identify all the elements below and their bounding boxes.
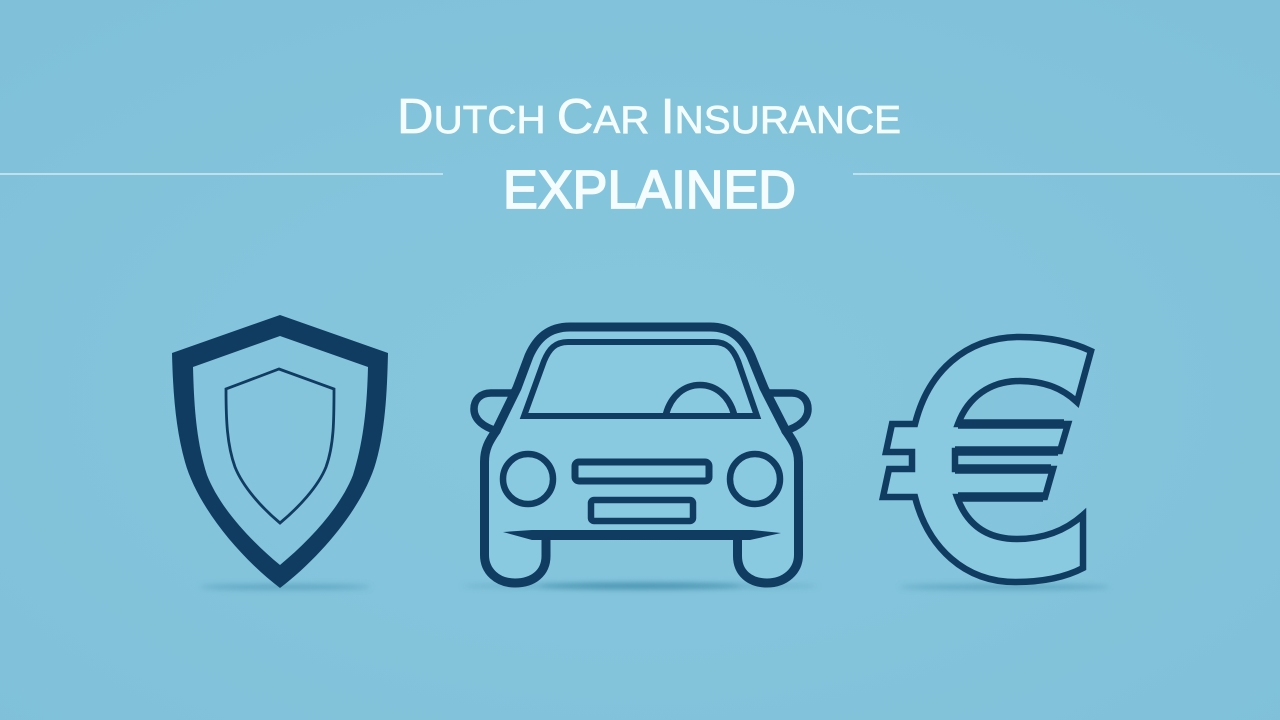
icon: car xyxy=(474,327,808,583)
number plate xyxy=(591,500,693,521)
heading: Explained: EXPLAINED xyxy=(503,160,796,220)
bumper xyxy=(503,530,781,540)
windshield xyxy=(524,342,757,416)
heading: Dutch Car Insurance: DUTCH CAR INSURANCE xyxy=(397,90,901,144)
grille xyxy=(575,462,709,481)
icon: euro symbol xyxy=(883,337,1091,582)
shield inner outline xyxy=(226,369,334,523)
euro outline xyxy=(883,337,1091,582)
steering wheel arc xyxy=(666,385,734,414)
right mirror xyxy=(770,393,808,431)
right headlight xyxy=(730,454,780,504)
icon: shield xyxy=(172,315,388,588)
left headlight xyxy=(503,454,553,504)
title xyxy=(397,90,901,220)
ground shadows xyxy=(200,582,1110,590)
left mirror xyxy=(474,393,513,431)
car body xyxy=(484,327,798,583)
shield outer frame xyxy=(172,315,388,588)
euro bars xyxy=(955,424,1064,497)
